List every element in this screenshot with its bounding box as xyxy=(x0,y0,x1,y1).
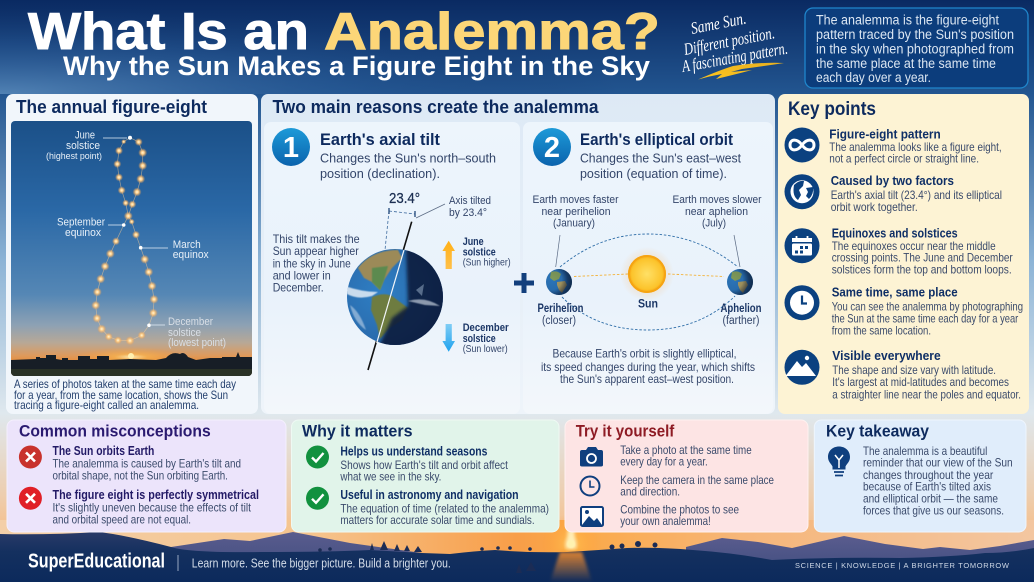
icon: globe xyxy=(784,174,820,209)
misconception: Sun orbits Earth: orbital shape, not the Sun orbiting Earth. xyxy=(52,469,228,482)
icon: camera xyxy=(580,447,603,466)
key point: equinoxes and solstices xyxy=(832,226,1013,276)
definition box: the same place at the same time xyxy=(816,56,996,71)
handwritten tagline: Different position. xyxy=(682,23,776,59)
key point: same time, same place: from the same location. xyxy=(832,324,931,337)
key point: same time, same place xyxy=(832,286,1023,337)
Perihelion label xyxy=(538,303,584,327)
Aphelion label: Aphelion xyxy=(720,303,762,315)
step: take a photo: every day for a year. xyxy=(620,456,708,469)
title: Analemma? xyxy=(324,3,660,61)
June solstice label: solstice xyxy=(463,247,496,259)
takeaway text: reminder that our view of the Sun xyxy=(863,457,1013,470)
panel: why it matters xyxy=(292,420,559,532)
perihelion speed note xyxy=(532,194,619,267)
footer tagline: Learn more. See the bigger picture. Build a brighter you. xyxy=(192,556,451,570)
key point: figure-eight pattern: Figure-eight pattern xyxy=(829,127,941,141)
orbit explanation: its speed changes during the year, which shifts xyxy=(541,361,755,374)
orbit description xyxy=(580,152,742,181)
subtitle: Why the Sun Makes a Figure Eight in the Sky xyxy=(63,51,650,81)
Perihelion label: Perihelion xyxy=(538,303,584,315)
icon: cross 2 xyxy=(19,487,42,510)
panel: two main reasons xyxy=(261,94,775,414)
tilt explanation: This tilt makes the xyxy=(273,232,360,246)
footer brand: SuperEducational xyxy=(28,551,165,573)
number badge 1 xyxy=(272,128,310,166)
takeaway text: forces that give us our seasons. xyxy=(863,504,1004,517)
axial tilt description xyxy=(320,152,496,181)
photo caption xyxy=(14,378,236,412)
December solstice label: solstice xyxy=(463,333,496,345)
plus sign xyxy=(514,273,534,293)
axial tilt heading: Earth's axial tilt xyxy=(320,131,440,149)
icon: clock xyxy=(784,285,820,320)
misconception: perfectly symmetrical: The figure eight is perfectly symmetrical xyxy=(52,488,259,502)
panel: try it yourself xyxy=(565,420,808,532)
step: take a photo xyxy=(620,444,752,469)
tilt explanation: December. xyxy=(273,280,324,294)
Sun xyxy=(620,247,674,301)
icon: check 2 xyxy=(306,487,329,510)
icon: cross 1 xyxy=(19,446,42,468)
photo label: June solstice: (highest point) xyxy=(46,151,102,162)
key point: equinoxes and solstices: solstices form the top and bottom loops. xyxy=(832,263,1012,276)
step: combine the photos: Combine the photos to see xyxy=(620,503,739,516)
handwritten tagline: A fascinating pattern. xyxy=(680,39,789,76)
icon: clock xyxy=(580,476,600,496)
axis tilted callout xyxy=(416,195,491,219)
photo label: June solstice: solstice xyxy=(66,140,100,152)
photo label: December solstice: (lowest point) xyxy=(168,337,226,349)
June solstice label: (Sun higher) xyxy=(463,257,511,269)
Aphelion label: (farther) xyxy=(722,315,760,327)
analemma photo xyxy=(11,121,252,376)
perihelion speed note: Earth moves faster xyxy=(532,194,619,206)
misconception: perfectly symmetrical xyxy=(52,488,259,526)
footer landscape xyxy=(0,514,1034,582)
orbit description: Changes the Sun's east–west xyxy=(580,152,742,166)
tilt explanation: Sun appear higher xyxy=(273,244,359,258)
icon: mountain xyxy=(784,350,820,385)
panel heading: two main reasons: Two main reasons create the analemma xyxy=(272,96,599,117)
definition box: each day over a year. xyxy=(816,70,931,85)
photo caption: for a year, from the same location, shows the Sun xyxy=(14,389,228,402)
photo label: September equinox: September xyxy=(57,217,105,229)
tilt explanation xyxy=(273,232,360,294)
orbit description: position (equation of time). xyxy=(580,167,727,181)
Perihelion label: (closer) xyxy=(542,315,576,327)
aphelion speed note: near aphelion xyxy=(685,206,748,218)
orbit explanation: the Sun's apparent east–west position. xyxy=(560,373,734,386)
number badge 1: 1 xyxy=(283,132,299,164)
step: take a photo: Take a photo at the same time xyxy=(620,444,752,457)
title xyxy=(28,3,660,61)
photo caption: A series of photos taken at the same time each day xyxy=(14,378,236,391)
Earth at perihelion xyxy=(546,269,572,295)
key point: visible everywhere xyxy=(832,349,1021,401)
definition box: pattern traced by the Sun's position xyxy=(816,27,1014,42)
misconceptions heading: Common misconceptions xyxy=(19,422,211,441)
icon: check 1 xyxy=(306,446,329,468)
orbit heading: Earth's elliptical orbit xyxy=(580,131,733,149)
benefit: seasons: what we see in the sky. xyxy=(340,471,441,484)
misconception: perfectly symmetrical: and orbital speed are not equal. xyxy=(52,513,191,526)
panel: common misconceptions xyxy=(7,420,286,532)
misconception: Sun orbits Earth xyxy=(52,444,241,482)
takeaway text xyxy=(863,445,1013,517)
icon: calendar xyxy=(784,228,820,263)
key point: caused by two factors: Caused by two factors xyxy=(831,174,954,188)
angle marker 23.4 degrees: 23.4° xyxy=(389,191,420,207)
perihelion speed note: (January) xyxy=(553,218,595,230)
photo label: September equinox: equinox xyxy=(65,227,101,239)
number badge 2 xyxy=(533,128,571,166)
panel: the annual figure-eight xyxy=(6,94,258,414)
panel heading: annual figure-eight: The annual figure-eight xyxy=(16,96,207,117)
misconception: perfectly symmetrical: It's slightly uneven because the effects of tilt xyxy=(52,502,252,515)
handwritten tagline xyxy=(680,9,789,80)
photo label: September equinox xyxy=(57,217,105,239)
takeaway text: and elliptical orbit — the same xyxy=(863,493,998,506)
arrow: June up xyxy=(442,241,455,269)
key point: equinoxes and solstices: The equinoxes occur near the middle xyxy=(832,240,996,253)
aphelion speed note: (July) xyxy=(702,218,726,230)
Aphelion label xyxy=(720,303,762,327)
icon: infinity xyxy=(784,128,820,162)
footer motto: SCIENCE | KNOWLEDGE | A BRIGHTER TOMORROW xyxy=(795,561,1010,570)
benefit: astronomy and navigation xyxy=(340,488,549,527)
Earth at aphelion xyxy=(727,269,753,295)
benefit: seasons: Shows how Earth's tilt and orbit affect xyxy=(340,459,509,472)
photo caption: tracing a figure-eight called an analemma. xyxy=(14,399,199,412)
photo label: March equinox: March xyxy=(173,239,201,251)
panel: key points xyxy=(778,94,1029,414)
key point: visible everywhere: Visible everywhere xyxy=(832,349,941,363)
benefit: astronomy and navigation: Useful in astronomy and navigation xyxy=(340,488,519,502)
key point: figure-eight pattern xyxy=(829,127,1002,166)
key point: caused by two factors: orbit work together. xyxy=(831,201,918,214)
arrow: December down xyxy=(442,324,455,352)
key point: visible everywhere: It's largest at mid-latitudes and becomes xyxy=(832,376,1009,389)
photo label: March equinox: equinox xyxy=(173,249,209,261)
panel: key takeaway xyxy=(814,420,1026,532)
photo label: June solstice xyxy=(46,130,102,162)
step: combine the photos: your own analemma! xyxy=(620,515,711,528)
key point: caused by two factors: Earth's axial tilt (23.4°) and its elliptical xyxy=(831,189,1002,202)
key point: figure-eight pattern: The analemma looks like a figure eight, xyxy=(829,141,1002,154)
benefit: seasons: Helps us understand seasons xyxy=(340,445,487,459)
why it matters heading: Why it matters xyxy=(302,422,412,441)
sub-panel: Earth's axial tilt xyxy=(264,122,520,370)
handwritten tagline: Same Sun. xyxy=(689,9,748,38)
icon: light bulb xyxy=(828,446,850,476)
step: keep the camera still: and direction. xyxy=(620,486,680,499)
takeaway text: changes throughout the year xyxy=(863,469,993,482)
December solstice label xyxy=(463,322,509,355)
axial tilt description: position (declination). xyxy=(320,167,440,181)
key point: same time, same place: Same time, same place xyxy=(832,286,958,300)
misconception: Sun orbits Earth: The analemma is caused by Earth's tilt and xyxy=(52,458,241,471)
definition box: The analemma is the figure-eight xyxy=(816,12,999,28)
orbit explanation xyxy=(541,348,755,386)
key point: visible everywhere: The shape and size vary with latitude. xyxy=(832,364,996,377)
axis tilted callout: Axis tilted xyxy=(449,195,491,207)
misconception: Sun orbits Earth: The Sun orbits Earth xyxy=(52,444,154,458)
benefit: astronomy and navigation: matters for accurate solar time and sundials. xyxy=(340,514,535,527)
key point: caused by two factors xyxy=(831,174,1002,214)
tilt explanation: and lower in xyxy=(273,268,331,282)
axial tilt description: Changes the Sun's north–south xyxy=(320,152,496,166)
orbit explanation: Because Earth's orbit is slightly elliptical, xyxy=(552,348,736,361)
step: keep the camera still: Keep the camera in the same place xyxy=(620,474,774,487)
photo label: June solstice: June xyxy=(75,130,95,142)
icon: picture xyxy=(581,507,603,526)
step: combine the photos xyxy=(620,503,739,528)
number badge 2: 2 xyxy=(544,132,560,164)
definition box: in the sky when photographed from xyxy=(816,42,1014,56)
angle marker 23.4 degrees xyxy=(385,191,420,250)
takeaway text: The analemma is a beautiful xyxy=(863,445,987,458)
aphelion speed note: Earth moves slower xyxy=(672,194,762,206)
perihelion speed note: near perihelion xyxy=(542,206,610,218)
June solstice label: June xyxy=(463,236,484,248)
sub-panel: Earth's elliptical orbit xyxy=(523,122,773,414)
December solstice label: December xyxy=(463,322,509,334)
key takeaway heading: Key takeaway xyxy=(826,422,929,441)
benefit: seasons xyxy=(340,445,509,484)
key point: figure-eight pattern: not a perfect circle or straight line. xyxy=(829,153,979,166)
orbit ellipse xyxy=(560,234,738,330)
step: keep the camera still xyxy=(620,474,774,499)
photo label: March equinox xyxy=(173,239,209,261)
Sun label: Sun xyxy=(638,299,658,311)
December solstice label: (Sun lower) xyxy=(463,343,508,355)
title: What Is an xyxy=(28,3,309,61)
key point: equinoxes and solstices: Equinoxes and solstices xyxy=(832,226,958,240)
photo label: December solstice: solstice xyxy=(168,327,201,339)
try it yourself heading: Try it yourself xyxy=(576,422,675,441)
Sun-Earth distance arrows xyxy=(574,274,724,276)
aphelion speed note xyxy=(672,194,762,267)
photo label: December solstice xyxy=(168,316,226,349)
key points heading: Key points xyxy=(788,98,876,120)
takeaway text: because of Earth's tilted axis xyxy=(863,481,991,494)
Earth globe with tilted axis xyxy=(345,222,446,370)
photo label: December solstice: December xyxy=(168,316,213,328)
benefit: astronomy and navigation: The equation of time (related to the analemma) xyxy=(340,502,549,515)
tilt explanation: in the sky in June xyxy=(273,256,351,270)
definition box xyxy=(805,8,1028,88)
axis tilted callout: by 23.4° xyxy=(449,207,487,219)
June solstice label xyxy=(463,236,511,269)
